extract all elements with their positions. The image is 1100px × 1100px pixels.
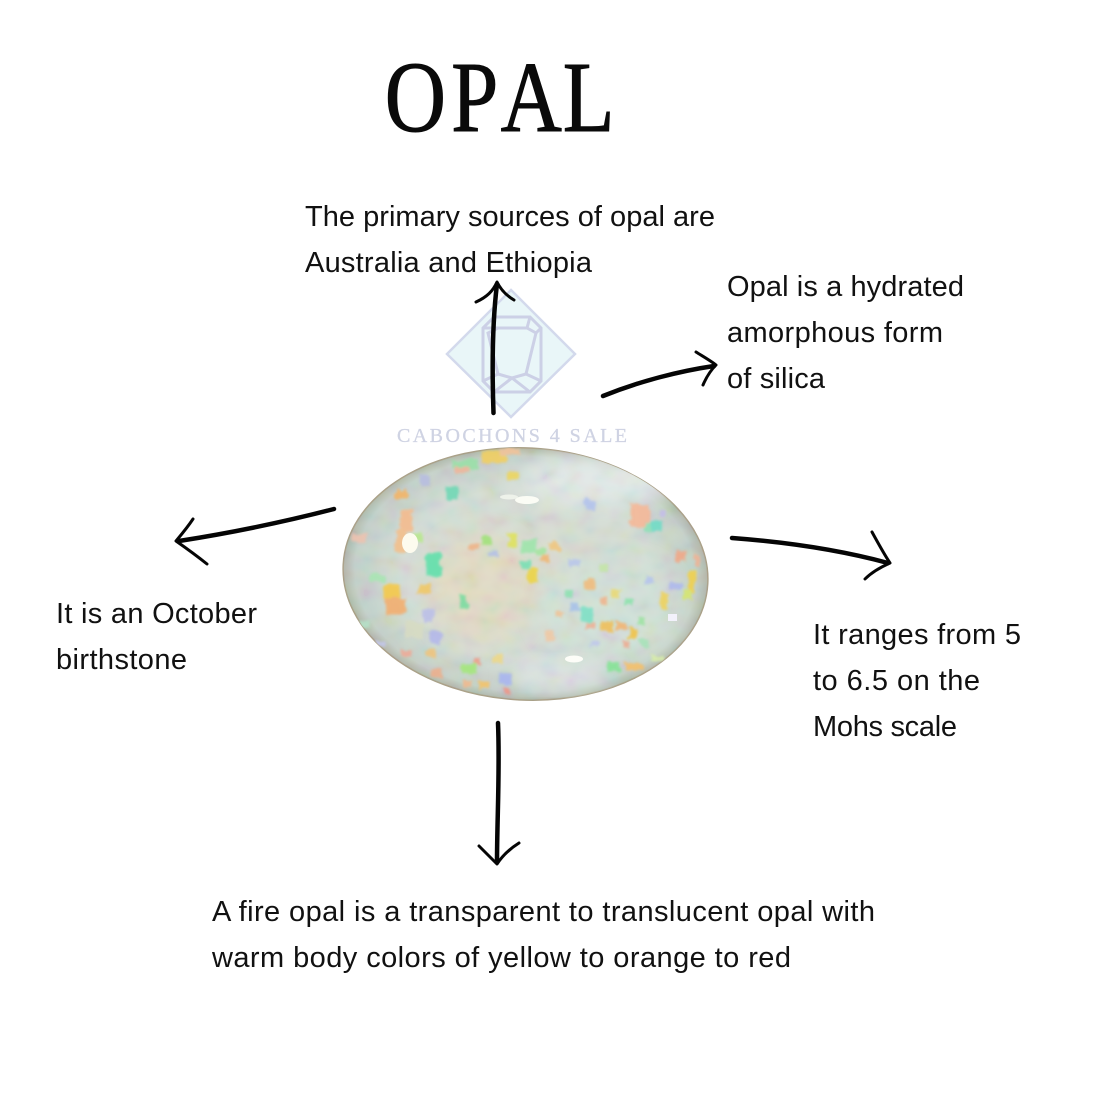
watermark: cabochons 4 sale logo — [397, 290, 627, 447]
text: sources: The primary sources of opal are — [305, 201, 715, 233]
icon: diamond with gem outline — [447, 290, 575, 417]
text: hardness — [813, 619, 1021, 743]
text: birthstone: birthstone — [56, 644, 187, 676]
text: composition: amorphous form — [727, 317, 943, 349]
arrow: to hardness — [732, 532, 890, 579]
arrow: to composition — [603, 352, 716, 396]
text: composition: Opal is a hydrated — [727, 271, 964, 303]
watermark text: CABOCHONS 4 SALE — [397, 425, 627, 447]
text: birthstone: It is an October — [56, 598, 257, 630]
text: fire opal: warm body colors of yellow to orange to red — [211, 942, 791, 974]
text: hardness: It ranges from 5 — [813, 619, 1021, 651]
text: fire opal: A fire opal is a transparent to translucent opal with — [212, 896, 875, 928]
text: hardness: Mohs scale — [813, 711, 957, 743]
arrow: to fire opal — [479, 723, 519, 864]
opal gemstone — [337, 439, 714, 709]
text: composition: of silica — [727, 363, 826, 395]
text: composition — [727, 271, 964, 395]
text: fire opal — [211, 896, 875, 974]
highlights — [402, 533, 418, 553]
title: OPAL — [385, 42, 615, 154]
text: hardness: to 6.5 on the — [813, 665, 980, 697]
text: birthstone — [56, 598, 257, 676]
text: sources — [305, 201, 715, 279]
arrow: up to sources — [476, 282, 514, 413]
arrow: to birthstone — [176, 509, 334, 564]
text: sources: Australia and Ethiopia — [305, 247, 593, 279]
